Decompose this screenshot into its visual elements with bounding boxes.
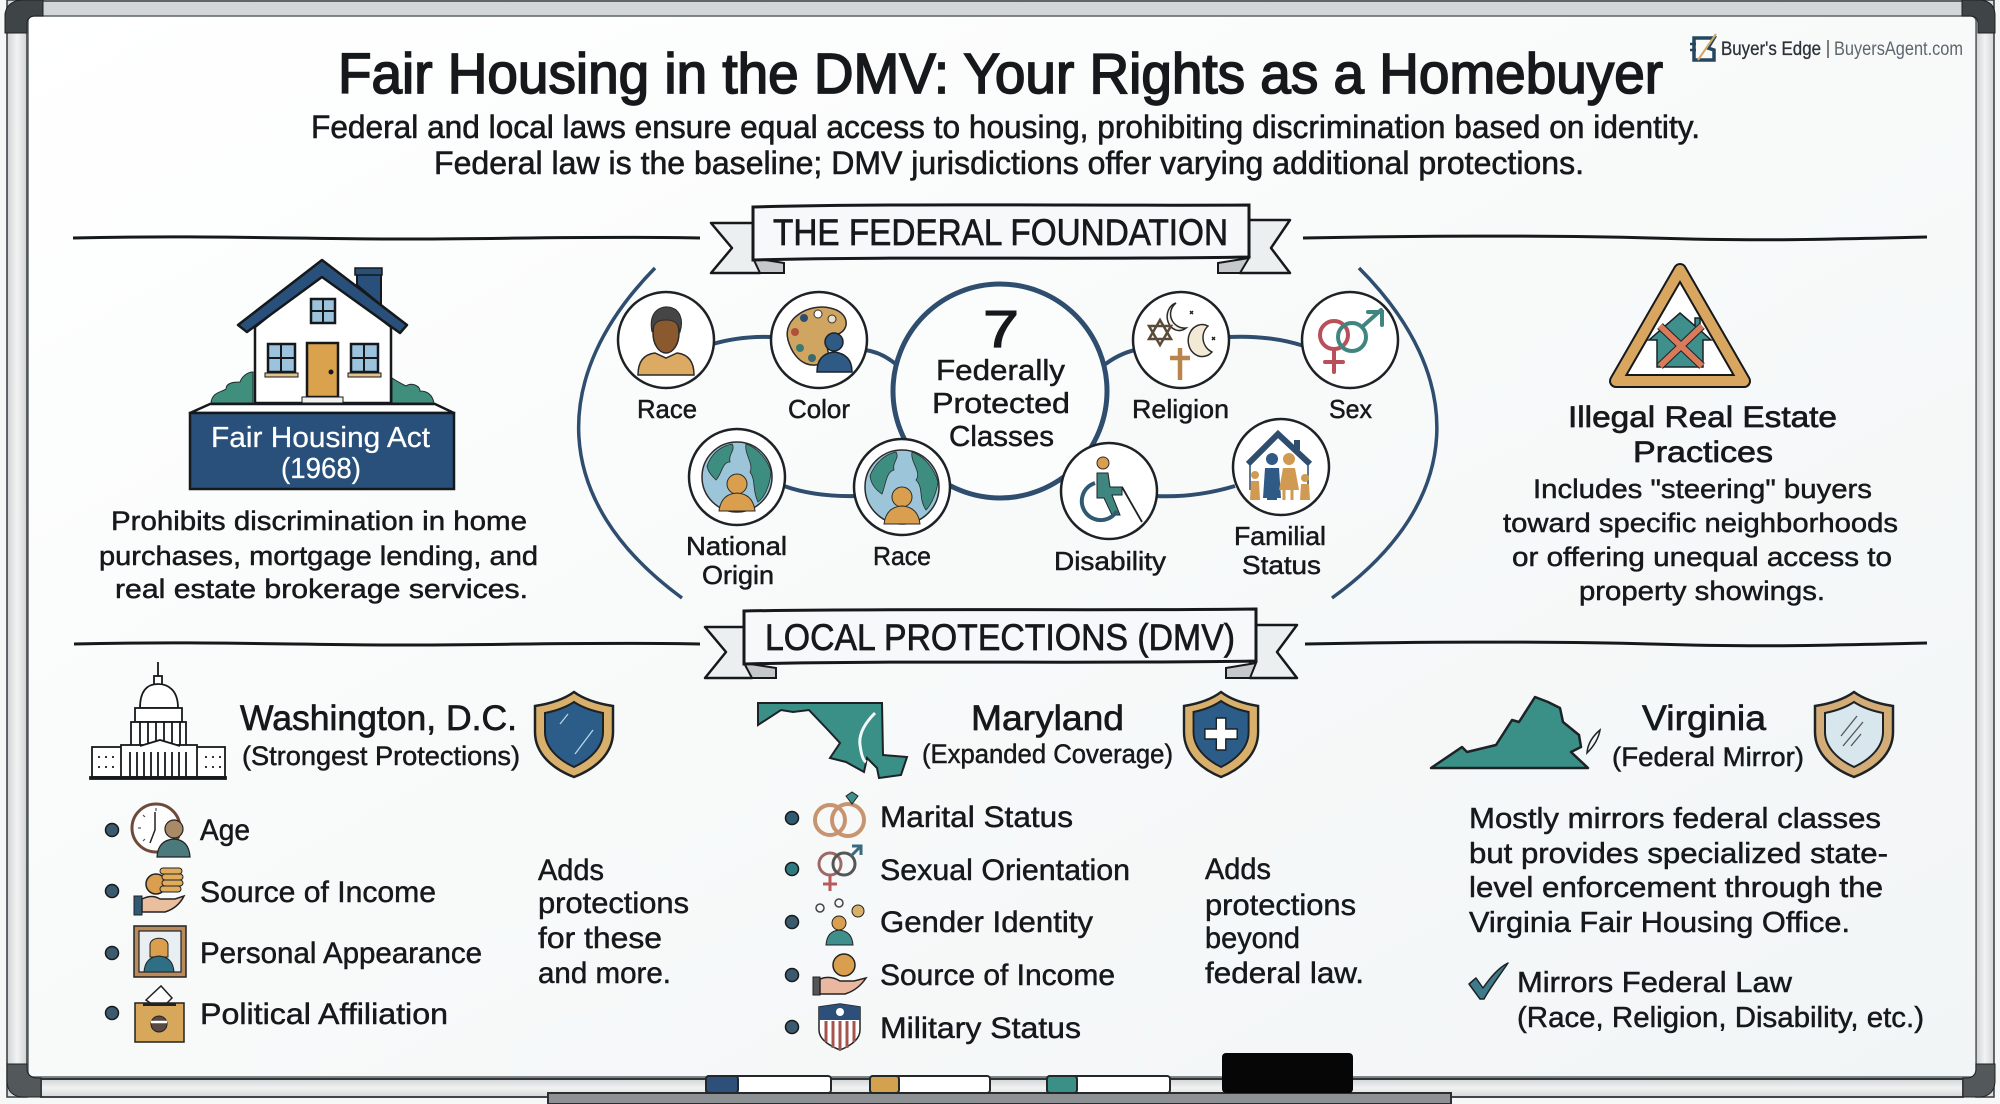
description: Includes "steering" buyers [1533, 474, 1872, 504]
panel: virginia [1431, 692, 1924, 1034]
banner: the federal foundation [711, 205, 1290, 273]
icon: gender identity [816, 899, 864, 945]
description: Mostly mirrors federal classes [1469, 803, 1881, 835]
label: age: Age [200, 814, 250, 847]
icon: warning triangle [1616, 270, 1744, 381]
description: property showings. [1579, 576, 1825, 606]
label: political affiliation: Political Affiliation [200, 998, 448, 1031]
icon: rings [815, 792, 864, 836]
icon: mirror shield [1815, 692, 1893, 777]
note: mirrors federal law: (Race, Religion, Disability, etc.) [1517, 1002, 1924, 1034]
label: race (second): Race [873, 541, 931, 571]
description [1503, 474, 1898, 606]
label: gender identity: Gender Identity [880, 906, 1093, 939]
class: race [618, 292, 714, 388]
icon: house on plinth [190, 260, 454, 489]
class: race (second) [854, 439, 950, 535]
note: maryland: federal law. [1205, 957, 1364, 990]
heading: Maryland [971, 699, 1124, 738]
centre circle: Protected [932, 388, 1070, 420]
banner: local protections [705, 609, 1297, 678]
icon: capitol [90, 662, 226, 779]
marker tray [548, 1053, 1451, 1104]
note: dc: protections [538, 887, 689, 920]
description: purchases, mortgage lending, and [99, 541, 538, 571]
label: familial status: Status [1242, 550, 1321, 580]
list: dc protections [106, 804, 482, 1042]
class: disability [1061, 443, 1157, 539]
icon: political affiliation [135, 986, 184, 1042]
description [99, 506, 538, 604]
orange marker [870, 1076, 990, 1093]
icon: check mark [1469, 963, 1508, 999]
outer brackets [579, 268, 1437, 598]
label: familial status: Familial [1234, 521, 1326, 551]
label: religion: Religion [1132, 394, 1229, 424]
banner heading: THE FEDERAL FOUNDATION [773, 212, 1228, 253]
logo [1690, 34, 1963, 60]
note: maryland: protections [1205, 889, 1356, 922]
label: military status: Military Status [880, 1012, 1081, 1045]
panel: illegal practices [1503, 270, 1898, 606]
note: maryland: beyond [1205, 922, 1300, 955]
icon: virginia map [1431, 697, 1600, 768]
label: source of income: Source of Income [880, 959, 1115, 992]
heading: Practices [1633, 436, 1773, 469]
subheading: (Strongest Protections) [242, 741, 520, 771]
title: Fair Housing in the DMV: Your Rights as a Homebuyer [338, 42, 1663, 106]
note: mirrors federal law: Mirrors Federal Law [1517, 967, 1793, 999]
description: but provides specialized state- [1469, 838, 1888, 870]
blue marker [706, 1076, 831, 1093]
description: toward specific neighborhoods [1503, 508, 1898, 538]
note: maryland [1205, 853, 1364, 990]
connectors [713, 337, 1304, 496]
eraser [1222, 1053, 1353, 1093]
label: familial status [1234, 521, 1326, 580]
description [1469, 803, 1888, 939]
logo text: Buyer's Edge: Buyer's Edge [1721, 39, 1821, 60]
heading: Virginia [1642, 699, 1767, 738]
label: source of income: Source of Income [200, 876, 436, 909]
logo mark [1690, 34, 1716, 60]
label: sex: Sex [1329, 394, 1372, 424]
centre circle: Classes [949, 421, 1054, 453]
panel: fair housing act [99, 260, 538, 604]
icon: maryland map [758, 703, 907, 778]
label: marital status: Marital Status [880, 801, 1073, 834]
label: disability: Disability [1054, 546, 1166, 576]
description: Virginia Fair Housing Office. [1469, 907, 1850, 939]
panel: washington dc [90, 662, 689, 1042]
list: maryland protections [786, 792, 1130, 1050]
label: personal appearance: Personal Appearance [200, 937, 482, 970]
description: Prohibits discrimination in home [111, 506, 527, 536]
plinth label [190, 413, 454, 489]
heading: Illegal Real Estate [1568, 401, 1837, 434]
centre circle [893, 284, 1107, 498]
panel: seven protected classes [618, 284, 1398, 590]
class: familial status [1233, 419, 1329, 515]
icon: shield [535, 692, 613, 777]
label: color: Color [788, 394, 850, 424]
subheading: (Federal Mirror) [1612, 742, 1804, 772]
logo text: url: BuyersAgent.com [1834, 39, 1963, 60]
description: real estate brokerage services. [115, 574, 528, 604]
icon: personal appearance [134, 926, 186, 977]
centre circle: 7 [983, 301, 1019, 359]
panel: maryland [758, 692, 1364, 1050]
icon: age [132, 804, 190, 857]
icon: shield with cross [1184, 692, 1258, 777]
class: national origin [689, 429, 785, 525]
subtitle: Federal law is the baseline; DMV jurisdictions offer varying additional protections. [434, 145, 1584, 181]
icon: source of income [134, 868, 184, 915]
subheading: (Expanded Coverage) [922, 739, 1173, 769]
heading: Washington, D.C. [240, 699, 517, 738]
class: religion [1133, 292, 1229, 388]
class: sex [1302, 292, 1398, 388]
banner heading: LOCAL PROTECTIONS (DMV) [765, 617, 1235, 658]
teal marker [1047, 1076, 1170, 1093]
description: or offering unequal access to [1512, 542, 1892, 572]
icon: military [819, 1004, 860, 1050]
note: maryland: Adds [1205, 853, 1271, 886]
centre circle: Federally [936, 355, 1066, 387]
plinth label: Fair Housing Act [211, 422, 430, 454]
class: color [771, 292, 867, 388]
note: dc: Adds [538, 854, 604, 887]
note: dc [538, 854, 689, 990]
description: level enforcement through the [1469, 872, 1883, 904]
note: mirrors federal law [1517, 967, 1924, 1034]
heading [1568, 401, 1837, 469]
icon: coin and hand [813, 954, 866, 995]
note: dc: and more. [538, 957, 671, 990]
label: national origin: Origin [702, 560, 774, 590]
plinth label: (1968) [281, 453, 361, 485]
label: sexual orientation: Sexual Orientation [880, 854, 1130, 887]
label: national origin [686, 531, 787, 590]
icon: orientation [819, 846, 861, 891]
label: national origin: National [686, 531, 787, 561]
note: dc: for these [538, 922, 662, 955]
label: race: Race [637, 394, 697, 424]
subtitle [311, 109, 1700, 181]
subtitle: Federal and local laws ensure equal access to housing, prohibiting discrimination based on identity. [311, 109, 1700, 145]
